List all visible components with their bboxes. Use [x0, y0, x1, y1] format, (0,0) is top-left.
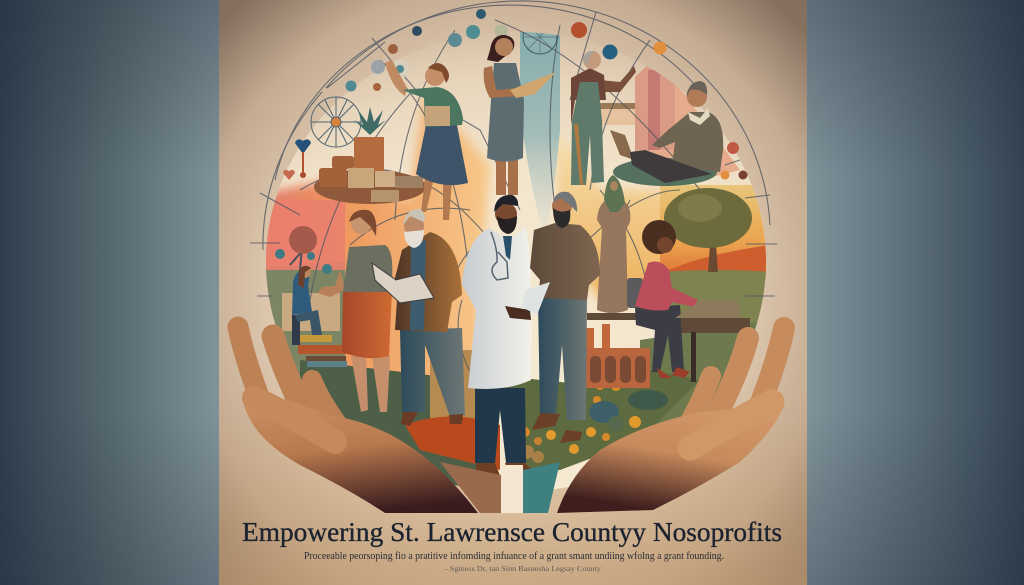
blue shirt [410, 240, 426, 330]
stacked boxes [348, 168, 423, 202]
dress [487, 63, 524, 162]
right side panel [807, 0, 1024, 585]
overalls [571, 82, 604, 185]
left hand [238, 327, 478, 513]
woman with afro at desk [587, 220, 750, 382]
folder [522, 282, 550, 315]
subtitle: Proceeable peorsoping fio a pratitive infomding infuance of a grant smant undiing wfolng a grant founding. [304, 551, 724, 562]
legs [351, 356, 390, 412]
grey hair [583, 51, 595, 66]
typewriter [675, 300, 742, 318]
arm [600, 66, 636, 92]
right thumb [690, 402, 772, 448]
jeans [538, 296, 587, 420]
laptop lid [610, 130, 634, 160]
cane [574, 124, 583, 185]
afro hair [642, 220, 676, 254]
legs [496, 160, 506, 195]
hair [553, 192, 577, 212]
sweater [530, 223, 600, 300]
raised arm [385, 60, 407, 96]
face [351, 214, 371, 234]
jeans [400, 328, 465, 417]
hair [428, 63, 449, 83]
face [495, 38, 513, 56]
woman in green top with book [385, 60, 468, 220]
icon: small heart [283, 170, 295, 180]
left thumb [254, 398, 335, 442]
agave plant [354, 107, 386, 135]
small pink tree with dots [275, 226, 332, 274]
tie [503, 236, 512, 260]
face [610, 181, 618, 191]
coat [462, 228, 531, 389]
table leg [691, 332, 696, 382]
brick archway with chimneys [586, 324, 650, 388]
hair [494, 195, 518, 212]
icon: spoked wheel [311, 97, 361, 147]
face [552, 196, 572, 216]
clay cylinders [319, 156, 354, 187]
keyboard [630, 150, 712, 183]
pink building [600, 58, 675, 150]
round plate [314, 170, 426, 204]
woman in grey dress with book [484, 35, 556, 195]
shoes [476, 463, 539, 478]
man at keyboard [610, 81, 723, 186]
circular community scene [255, 10, 770, 500]
collar [688, 108, 710, 125]
arms [318, 270, 345, 297]
torso [402, 87, 463, 127]
beard [553, 208, 570, 228]
man with open book [372, 209, 465, 426]
icon: heart key [295, 139, 311, 178]
head [687, 87, 707, 107]
face [404, 216, 424, 236]
open book [372, 263, 434, 303]
woman with red skirt [318, 210, 392, 412]
hand [505, 306, 531, 320]
shirt [571, 68, 606, 125]
head [495, 203, 517, 225]
title: Empowering St. Lawrensce Countyy Nosoprofits [242, 517, 782, 547]
central poster background [219, 0, 807, 585]
credit line: - Sginess Dr, tan Sinn Basnesha Legsay County [445, 564, 601, 573]
white beard [404, 230, 424, 248]
bottom centre wedge [440, 462, 560, 513]
skirt legs [635, 305, 684, 372]
shelf with pot and boxes [314, 107, 426, 204]
jumper [652, 112, 723, 172]
hair [487, 35, 514, 62]
scene backdrop [266, 56, 766, 490]
shoes [532, 413, 582, 443]
left palm [243, 398, 478, 513]
right hand fingers [688, 328, 784, 425]
jacket [392, 232, 462, 332]
skirt [416, 125, 468, 185]
man in brown sweater [522, 192, 600, 443]
stethoscope [491, 232, 508, 280]
man in overalls with cane [571, 51, 636, 185]
table [587, 313, 750, 333]
hair [686, 81, 707, 98]
sunflower foreground [526, 388, 668, 463]
book stack [298, 335, 347, 367]
head [425, 66, 445, 86]
plant pot [354, 137, 384, 171]
praying figure with hijab [597, 175, 630, 313]
seated reader with column [282, 266, 340, 345]
right hand [557, 328, 784, 513]
legs [421, 178, 452, 220]
geometric network lines [250, 1, 777, 380]
right landscape [500, 185, 770, 470]
green mat [613, 158, 717, 186]
pink top [635, 262, 698, 310]
shoes [401, 412, 463, 426]
head [583, 51, 601, 69]
skirt [342, 290, 392, 358]
face [657, 237, 673, 253]
trousers [475, 388, 526, 463]
chair [627, 278, 643, 308]
top [343, 245, 392, 292]
green headscarf [604, 175, 625, 212]
book [425, 106, 450, 126]
beard [497, 216, 517, 234]
robe [597, 200, 630, 313]
left side panel [0, 0, 219, 585]
left meadow [262, 200, 500, 500]
network dots [346, 9, 748, 180]
doctor in white coat [462, 195, 539, 478]
left hand fingers [238, 327, 338, 425]
shoes [657, 367, 690, 378]
hair [403, 209, 425, 225]
tree on the right [664, 188, 752, 272]
hair [349, 210, 376, 236]
arm [484, 66, 518, 98]
blue wheel strip [520, 32, 560, 227]
open book [510, 72, 556, 98]
right palm [557, 405, 784, 513]
